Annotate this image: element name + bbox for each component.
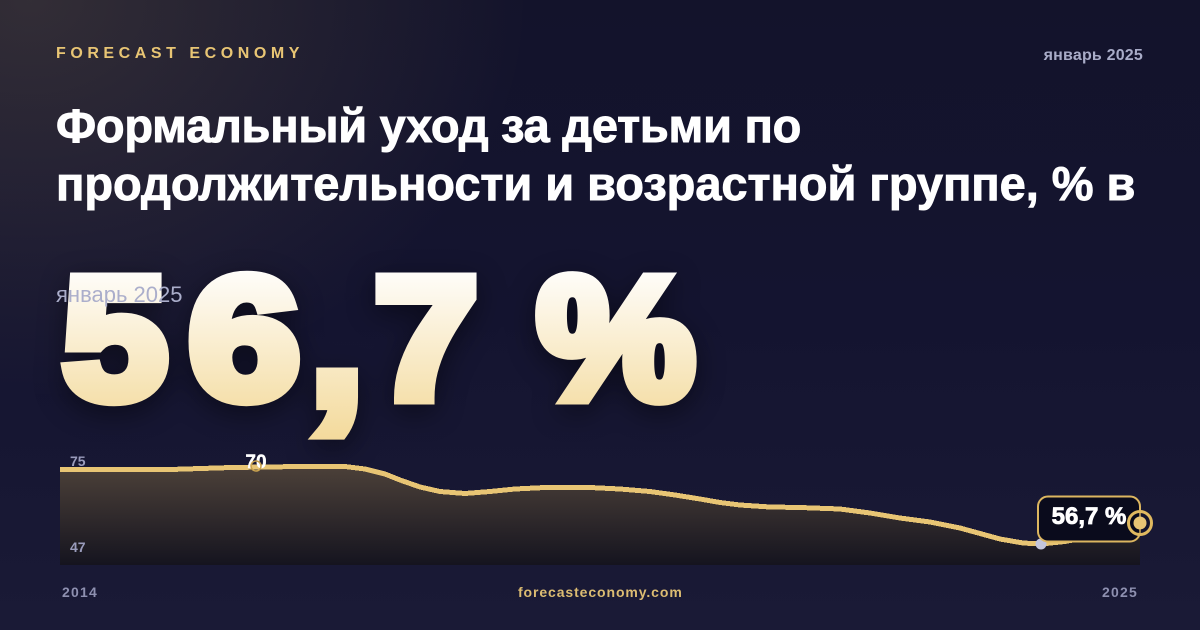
y label max: 75 [70,453,86,469]
big value: 6 [189,242,300,435]
y label min: 47 [70,539,86,555]
big value: 5 [63,242,167,435]
axis end year: 2025 [1102,584,1138,600]
title: Формальный уход за детьми по [56,99,801,152]
peak marker: 70 [245,452,267,473]
big value: 7 [374,242,478,436]
value callout [1038,496,1140,542]
big value: , [310,230,364,444]
end point marker [1128,512,1152,534]
big value [60,230,700,450]
website: forecasteconomy.com [518,584,683,600]
low point marker [1036,538,1046,550]
area fill [60,466,1140,565]
axis start year: 2014 [62,584,98,600]
big value: % [537,243,695,436]
brand label: FORECAST ECONOMY [56,45,304,62]
line chart [60,452,1153,565]
title [56,99,1135,210]
title: продолжительности и возрастной группе, % в [56,157,1135,210]
date overlay: январь 2025 [56,282,182,307]
date top right: январь 2025 [1044,47,1143,64]
value callout: 56,7 % [1052,503,1126,530]
trend line [60,466,1140,544]
